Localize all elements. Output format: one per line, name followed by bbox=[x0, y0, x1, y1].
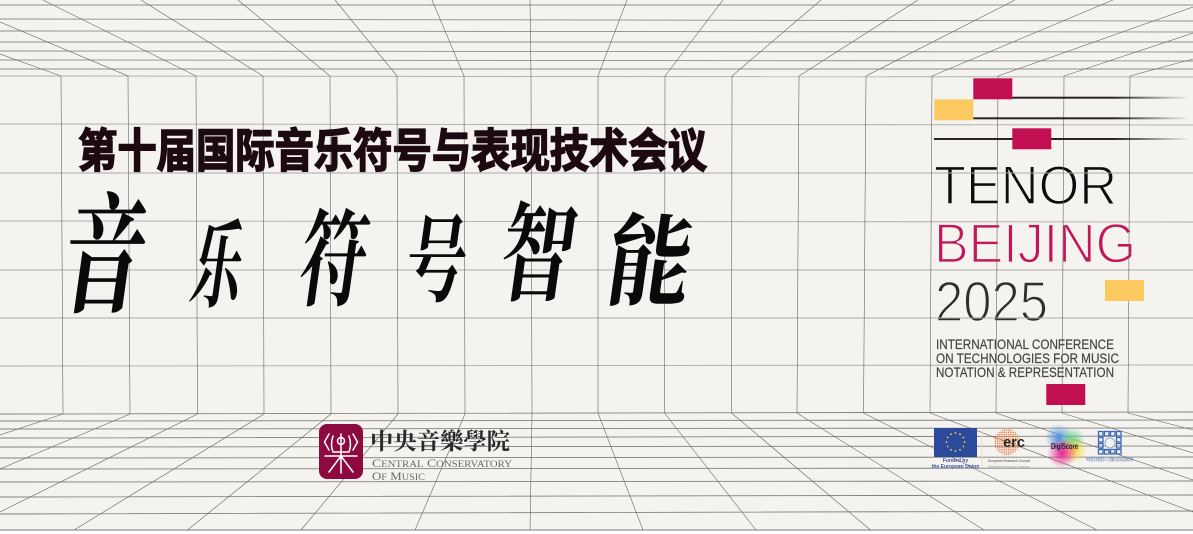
calligraphic heading: 音 bbox=[53, 154, 161, 340]
conservatory name in Chinese: 中央音樂學院 bbox=[370, 429, 510, 454]
conservatory name in English bbox=[372, 456, 512, 483]
conference description bbox=[936, 337, 1119, 380]
icon: blue lattice institute logo: 中央音乐学院音乐人工智能与音乐信息科技系 bbox=[1086, 457, 1133, 462]
icon: ERC: European Research Council bbox=[988, 459, 1030, 463]
heading: TENOR: TENOR bbox=[934, 154, 1117, 216]
bottom white strip bbox=[0, 531, 1193, 534]
sponsors row bbox=[932, 424, 1133, 470]
calligraphic heading: 号 bbox=[398, 185, 477, 321]
icon: EU flag: Funded by bbox=[943, 458, 968, 464]
conservatory name in English: OF MUSIC bbox=[372, 469, 425, 483]
icon: EU flag bbox=[932, 428, 979, 470]
calligraphic heading bbox=[53, 154, 703, 340]
icon: blue lattice institute logo bbox=[1086, 432, 1133, 462]
icon: ERC: Established by the European Commission bbox=[988, 465, 1030, 469]
icon: DigiScore bbox=[1045, 424, 1087, 468]
icon: conservatory seal bbox=[319, 424, 363, 479]
icon: EU flag: the European Union bbox=[932, 464, 979, 470]
conference description: ON TECHNOLOGIES FOR MUSIC bbox=[936, 351, 1119, 366]
conference description: INTERNATIONAL CONFERENCE bbox=[936, 337, 1114, 352]
icon: ERC: erc bbox=[1003, 435, 1025, 451]
conservatory name in English: CENTRAL CONSERVATORY bbox=[372, 456, 512, 470]
conference description: NOTATION & REPRESENTATION bbox=[936, 365, 1114, 380]
heading: BEIJING: BEIJING bbox=[934, 212, 1136, 274]
calligraphic heading: 符 bbox=[292, 177, 379, 328]
icon: ERC bbox=[982, 428, 1030, 469]
icon: DigiScore: DigiScore bbox=[1051, 442, 1078, 451]
calligraphic heading: 乐 bbox=[184, 190, 257, 326]
logo: staff lines and note blocks bbox=[934, 78, 1190, 405]
heading: 2025: 2025 bbox=[935, 270, 1048, 334]
logo text: TENOR BEIJING 2025 bbox=[934, 154, 1136, 380]
calligraphic heading: 能 bbox=[599, 182, 703, 326]
calligraphic heading: 智 bbox=[492, 168, 587, 323]
logo: Central Conservatory of Music bbox=[319, 424, 512, 483]
title: conference name in Chinese: 第十届国际音乐符号与表现技术会议 bbox=[78, 125, 707, 177]
